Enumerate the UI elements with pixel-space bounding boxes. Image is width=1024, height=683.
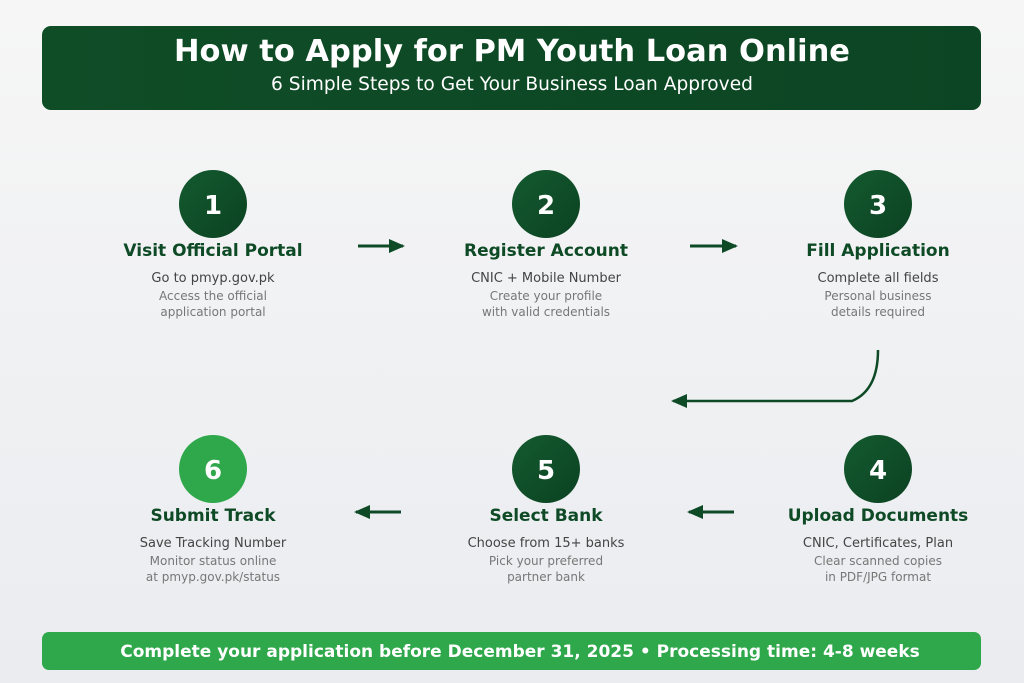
footer banner bbox=[42, 632, 981, 670]
step 5 bbox=[468, 435, 625, 584]
step 4: in PDF/JPG format bbox=[825, 570, 931, 584]
step 6: 6 bbox=[204, 456, 222, 486]
step 3: Personal business bbox=[824, 289, 932, 303]
step 6 bbox=[140, 435, 287, 584]
step 1: Access the official bbox=[159, 289, 267, 303]
step 3: Fill Application bbox=[806, 241, 950, 261]
step 2: Register Account bbox=[464, 241, 628, 261]
step 4: CNIC, Certificates, Plan bbox=[803, 536, 953, 551]
arrow 4-5 bbox=[689, 510, 734, 514]
step 4: 4 bbox=[869, 456, 887, 486]
step 2: 2 bbox=[537, 191, 555, 221]
step 5: Choose from 15+ banks bbox=[468, 536, 625, 551]
step 4: Clear scanned copies bbox=[814, 554, 942, 568]
step 6: Monitor status online bbox=[150, 554, 276, 568]
step 1: 1 bbox=[204, 191, 222, 221]
step 3: details required bbox=[831, 305, 925, 319]
step 2: Create your profile bbox=[490, 289, 602, 303]
step 1: Visit Official Portal bbox=[123, 241, 303, 261]
step 3 bbox=[806, 170, 950, 319]
footer banner: Complete your application before December 31, 2025 • Processing time: 4-8 weeks bbox=[120, 642, 920, 662]
step 6: at pmyp.gov.pk/status bbox=[146, 570, 280, 584]
step 1: application portal bbox=[160, 305, 266, 319]
step 1 bbox=[123, 170, 303, 319]
step 2: CNIC + Mobile Number bbox=[471, 271, 622, 286]
curved arrow 3-4 bbox=[673, 350, 878, 401]
step 6: Save Tracking Number bbox=[140, 536, 287, 551]
step 1: Go to pmyp.gov.pk bbox=[151, 271, 275, 286]
header bbox=[42, 26, 981, 110]
step 5: Pick your preferred bbox=[489, 554, 603, 568]
subtitle: 6 Simple Steps to Get Your Business Loan Approved bbox=[271, 74, 753, 95]
step 4: Upload Documents bbox=[788, 506, 968, 526]
step 2: with valid credentials bbox=[482, 305, 610, 319]
arrow 2-3 bbox=[690, 244, 736, 248]
step 3: Complete all fields bbox=[818, 271, 939, 286]
step 5: Select Bank bbox=[489, 506, 603, 526]
step 5: 5 bbox=[537, 456, 555, 486]
step 2 bbox=[464, 170, 628, 319]
step 6: Submit Track bbox=[150, 506, 276, 526]
step 5: partner bank bbox=[507, 570, 585, 584]
arrow 1-2 bbox=[358, 244, 403, 248]
title: How to Apply for PM Youth Loan Online bbox=[174, 34, 850, 69]
arrow 5-6 bbox=[356, 510, 401, 514]
step 4 bbox=[788, 435, 968, 584]
step 3: 3 bbox=[869, 191, 887, 221]
